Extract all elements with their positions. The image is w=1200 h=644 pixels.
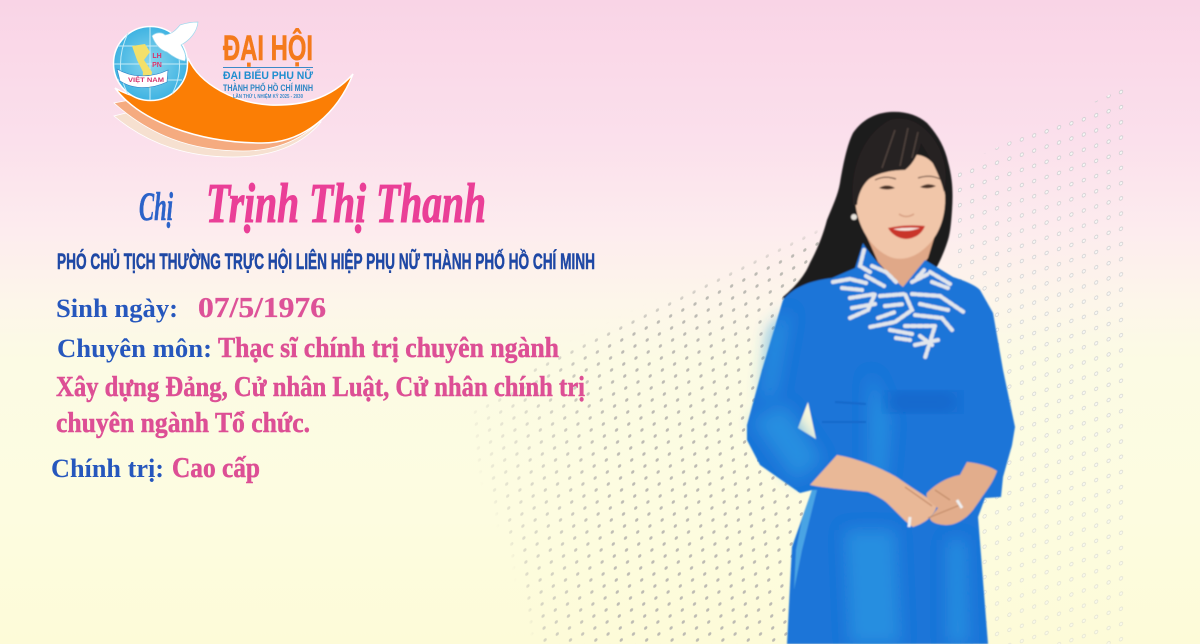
expertise line 3: chuyên ngành Tổ chức. bbox=[56, 407, 310, 439]
logo rule bbox=[223, 67, 313, 68]
congress logo bbox=[114, 22, 353, 157]
honorific: Chị bbox=[139, 184, 173, 229]
hair back bbox=[783, 112, 953, 305]
arm gap bbox=[798, 402, 816, 439]
expertise line 2: Xây dựng Đảng, Cử nhân Luật, Cử nhân chính trị bbox=[56, 371, 585, 403]
politics bbox=[51, 452, 260, 484]
dress shadow bbox=[888, 392, 957, 412]
finger lines bbox=[905, 487, 960, 518]
logo globe: PN bbox=[152, 62, 162, 69]
dress bbox=[747, 243, 1015, 644]
eyebrows bbox=[875, 176, 940, 180]
fringe highlights bbox=[882, 128, 918, 168]
expertise label: Chuyên môn: bbox=[57, 334, 212, 363]
logo globe bbox=[114, 26, 188, 100]
right hand bbox=[927, 462, 997, 525]
lips bbox=[888, 225, 925, 239]
portrait bbox=[747, 112, 1015, 644]
birth date bbox=[56, 293, 326, 324]
logo city name: THÀNH PHỐ HỒ CHÍ MINH bbox=[223, 82, 313, 93]
politics value: Cao cấp bbox=[172, 452, 260, 484]
fringe bbox=[853, 119, 946, 205]
dotted pattern left of portrait bbox=[460, 230, 820, 644]
left hand bbox=[810, 455, 937, 527]
dress side panel bbox=[794, 490, 817, 590]
earring bbox=[851, 214, 857, 220]
birth date label: Sinh ngày: bbox=[56, 294, 178, 323]
expertise line 1: Thạc sĩ chính trị chuyên ngành bbox=[218, 332, 559, 364]
birth date value: 07/5/1976 bbox=[198, 293, 326, 324]
waist folds bbox=[822, 402, 866, 422]
logo swoosh layers bbox=[114, 58, 353, 157]
collar embroidery bbox=[833, 250, 965, 358]
neck bbox=[866, 235, 935, 290]
dotted pattern right of portrait bbox=[950, 85, 1126, 644]
teeth bbox=[893, 228, 920, 231]
face bbox=[855, 155, 945, 259]
nose shadow bbox=[899, 214, 914, 216]
dress sheen bbox=[752, 310, 968, 644]
name: Trịnh Thị Thanh bbox=[206, 173, 486, 235]
rings bbox=[909, 500, 962, 527]
icon: dove bbox=[152, 22, 198, 61]
eyes bbox=[879, 184, 936, 190]
logo subheading: ĐẠI BIỂU PHỤ NỮ bbox=[223, 69, 314, 82]
logo heading: ĐẠI HỘI bbox=[223, 28, 313, 68]
politics label: Chính trị: bbox=[51, 454, 164, 483]
expertise bbox=[56, 332, 585, 439]
job title: PHÓ CHỦ TỊCH THƯỜNG TRỰC HỘI LIÊN HIỆP PHỤ NỮ THÀNH PHỐ HỒ CHÍ MINH bbox=[57, 248, 595, 274]
logo globe: VIỆT NAM bbox=[128, 75, 164, 84]
logo term: LẦN THỨ I, NHIỆM KỲ 2025 - 2030 bbox=[233, 92, 303, 100]
logo globe: LH bbox=[152, 53, 162, 60]
